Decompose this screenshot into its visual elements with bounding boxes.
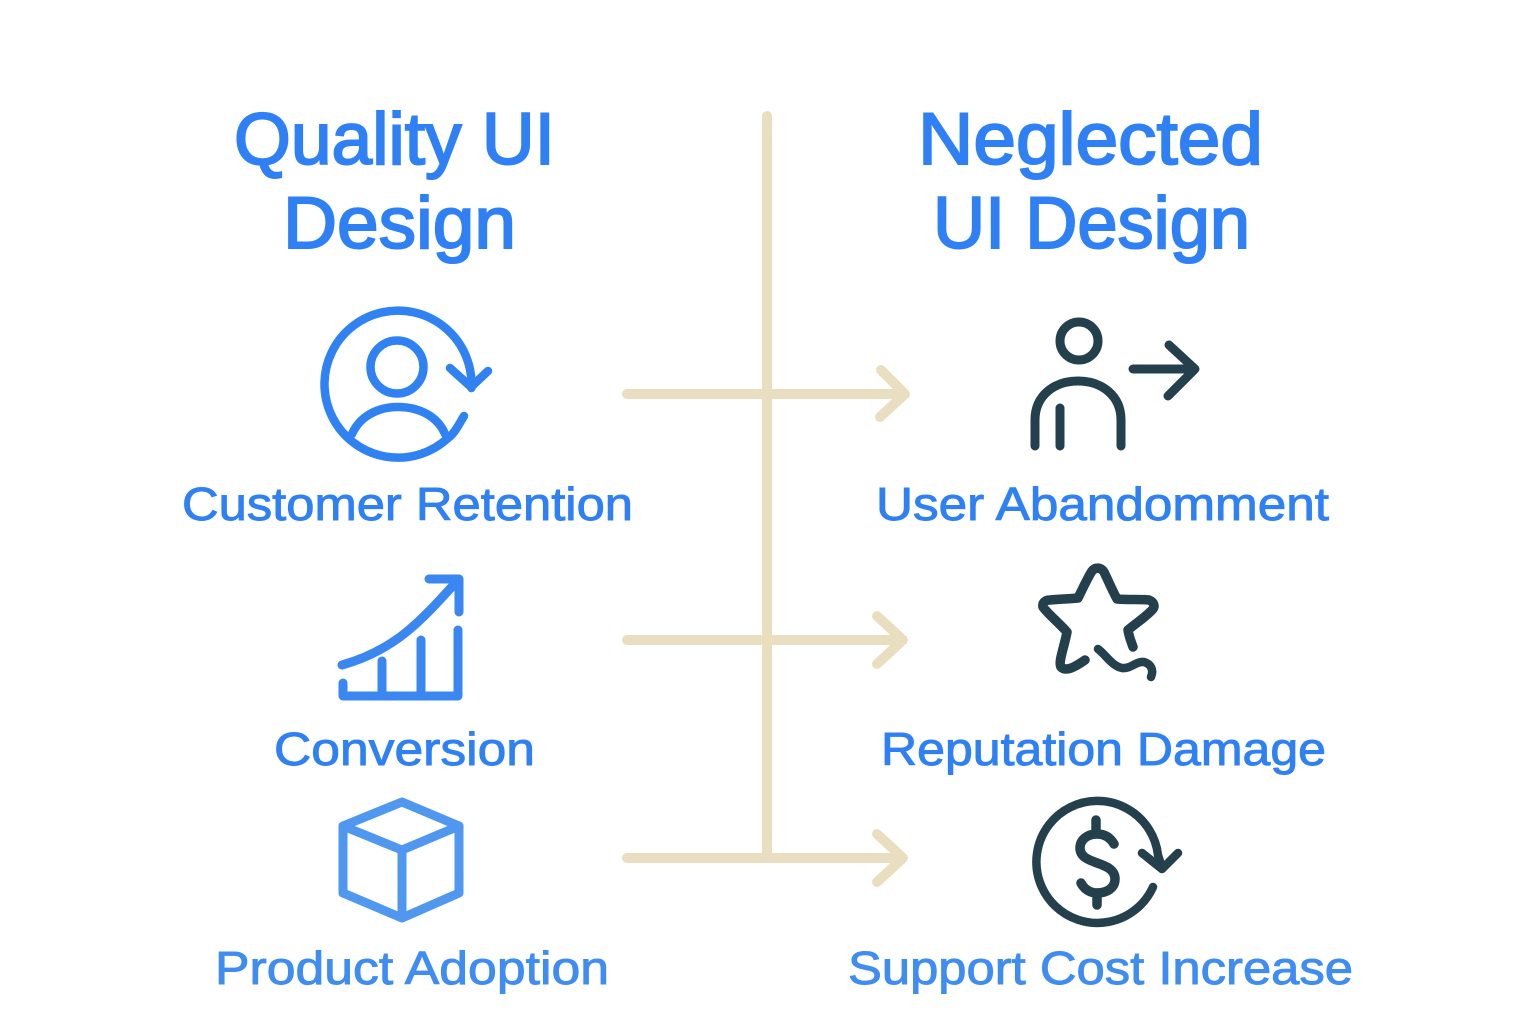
- icon: damaged star: [1043, 568, 1154, 677]
- label: User Abandonment: User Abandomment: [876, 478, 1329, 530]
- heading: Neglected UI Design: Neglected: [918, 99, 1263, 180]
- label: Support Cost Increase: Support Cost Increase: [848, 942, 1353, 994]
- icon: conversion growth chart: [342, 579, 459, 696]
- icon: support cost dollar cycle: [1036, 801, 1178, 923]
- icon: user abandonment: [1035, 322, 1195, 446]
- arrow: conversion to reputation damage: [627, 616, 903, 664]
- label: Customer Retention: Customer Retention: [182, 478, 633, 530]
- heading: Quality UI Design: Quality UI: [234, 99, 555, 180]
- icon: product box: [343, 802, 459, 918]
- heading: Neglected UI Design: UI Design: [933, 183, 1250, 264]
- heading: Quality UI Design: Design: [283, 183, 516, 264]
- arrow: product adoption to support cost increase: [627, 834, 903, 882]
- arrow: customer retention to user abandonment: [627, 370, 905, 417]
- label: Product Adoption: Product Adoption: [215, 942, 609, 994]
- icon: customer retention: [325, 311, 488, 458]
- label: Reputation Damage: Reputation Damage: [881, 723, 1326, 775]
- label: Conversion: Conversion: [274, 723, 535, 775]
- vertical divider: [762, 116, 772, 858]
- divider and arrows: [627, 116, 905, 882]
- heading: Neglected UI Design: [918, 99, 1263, 264]
- heading: Quality UI Design: [234, 99, 555, 264]
